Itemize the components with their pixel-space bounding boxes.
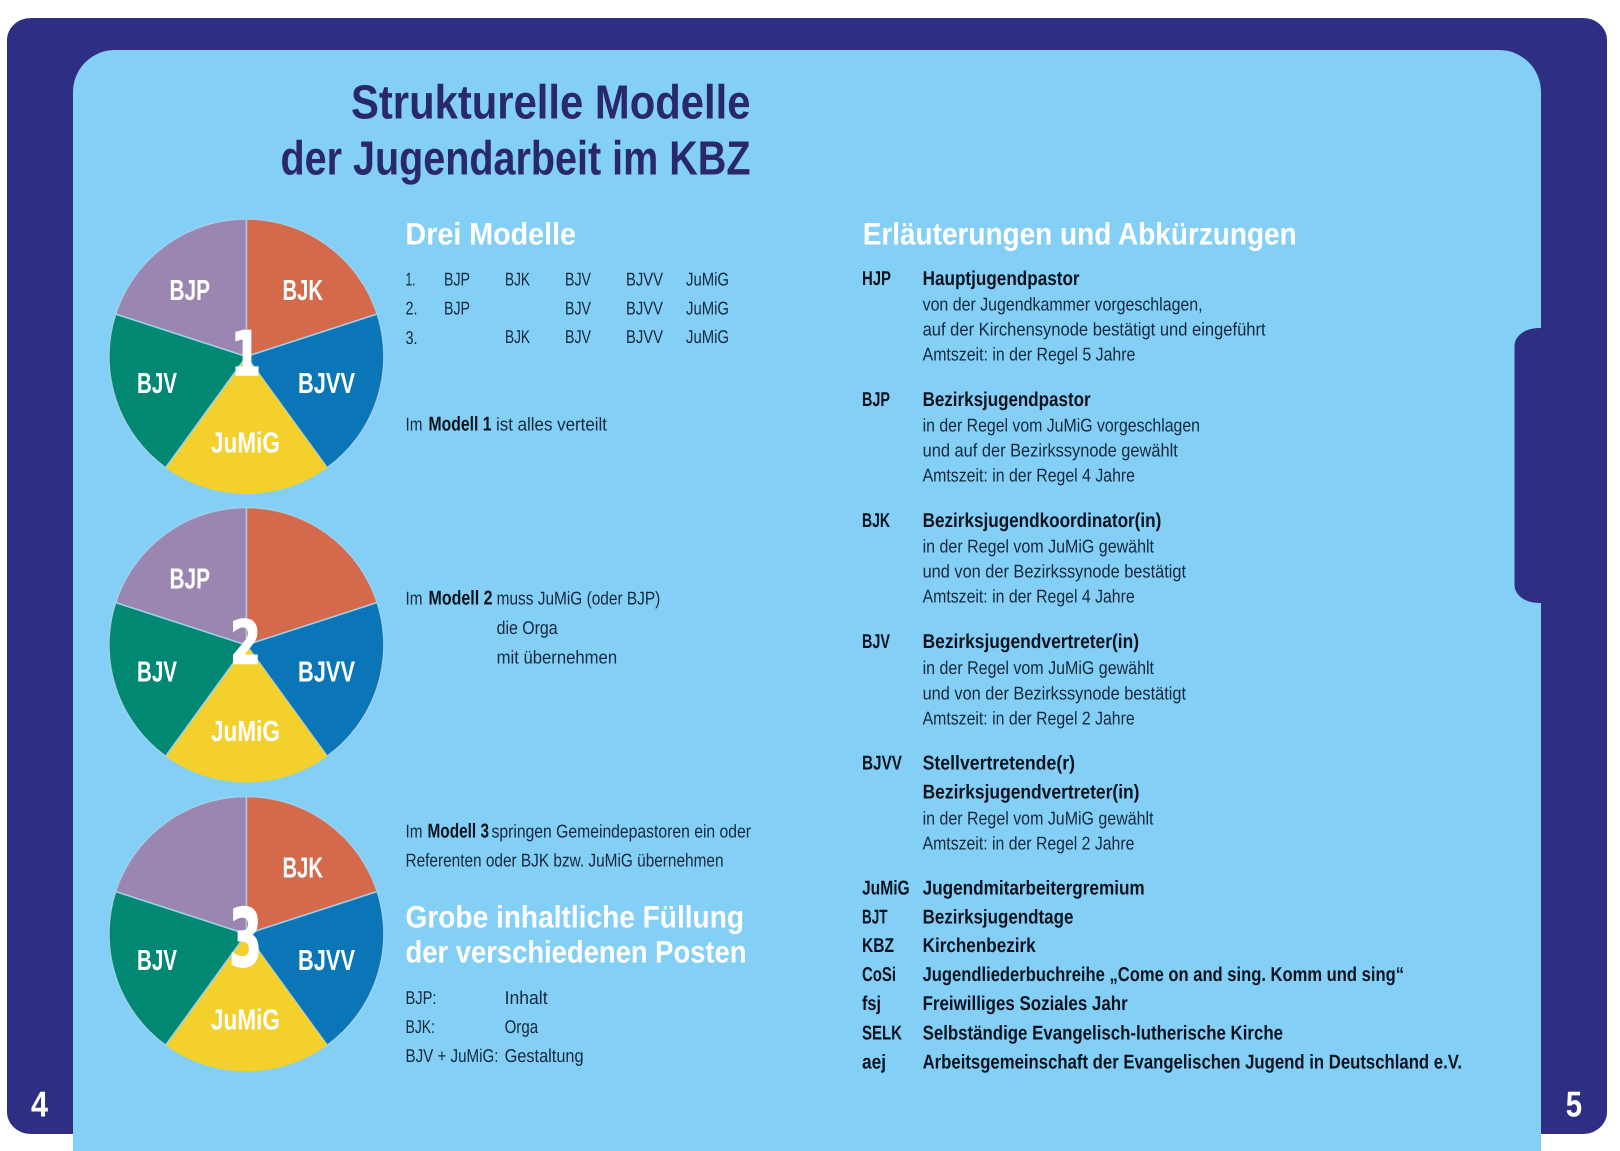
list: content of posts: BJK: — [406, 1016, 435, 1037]
title: Strukturelle Modelle — [351, 76, 750, 130]
pie chart: model 3: 3 — [229, 892, 262, 985]
pie chart: model 3: BJVV — [298, 945, 355, 977]
entry: BJP — [862, 389, 1200, 486]
entry: BJV: und von der Bezirkssynode bestätigt — [923, 682, 1186, 704]
text: model 1 note — [406, 413, 607, 435]
table: three models: BJP — [444, 268, 470, 290]
entry: BJK — [862, 510, 1186, 607]
entry: BJK: Amtszeit: in der Regel 4 Jahre — [923, 586, 1135, 607]
pie chart: model 2 — [109, 508, 384, 782]
table: three models: JuMiG — [686, 268, 729, 290]
list: further abbreviations: Selbständige Evangelisch-lutherische Kirche — [923, 1022, 1283, 1044]
text: model 2 note — [406, 587, 660, 667]
list: further abbreviations: Jugendmitarbeitergremium — [923, 877, 1145, 899]
table: three models: BJK — [505, 268, 530, 290]
list: further abbreviations: Jugendliederbuchreihe „Come on and sing. Komm und sing“ — [923, 964, 1404, 986]
text: model 1 note: Im — [406, 414, 422, 434]
pie chart: model 2: BJV — [137, 657, 177, 689]
pie chart: model 1: BJK — [282, 275, 323, 307]
entry: BJP: Amtszeit: in der Regel 4 Jahre — [923, 465, 1135, 486]
heading: Drei Modelle: Drei Modelle — [406, 216, 576, 252]
list: further abbreviations: JuMiG — [862, 877, 910, 899]
list: content of posts: Inhalt — [505, 987, 548, 1008]
pie chart: model 3 — [109, 796, 384, 1071]
heading: Grobe inhaltliche Füllung: Grobe inhaltliche Füllung — [406, 900, 744, 934]
table: three models: BJV — [565, 298, 591, 318]
text: model 2 note: Modell 2 — [428, 587, 492, 609]
list: further abbreviations: BJT — [862, 906, 888, 928]
text: model 3 note: Modell 3 — [428, 820, 489, 842]
text: model 3 note: springen Gemeindepastoren ein oder — [492, 821, 751, 842]
navy side tab — [1514, 328, 1541, 603]
title — [280, 76, 750, 186]
entry: BJVV — [862, 752, 1154, 853]
list: content of posts: Orga — [505, 1016, 539, 1037]
entry: BJV: Bezirksjugendvertreter(in) — [923, 631, 1139, 653]
pie chart: model 1: BJV — [137, 368, 177, 400]
entry: HJP: Hauptjugendpastor — [923, 268, 1080, 290]
pie chart: model 3: BJK — [282, 852, 323, 884]
list: content of posts: Gestaltung — [505, 1045, 584, 1066]
list: further abbreviations: aej — [862, 1051, 886, 1073]
list: further abbreviations: Bezirksjugendtage — [923, 906, 1073, 928]
table: three models: JuMiG — [686, 298, 729, 318]
entry: HJP: auf der Kirchensynode bestätigt und eingeführt — [923, 319, 1266, 340]
pie chart: model 1: BJVV — [298, 368, 355, 400]
text: model 3 note: Referenten oder BJK bzw. JuMiG übernehmen — [406, 850, 724, 871]
table: three models: JuMiG — [686, 326, 729, 347]
list: content of posts: BJP: — [406, 987, 436, 1008]
entry: HJP: von der Jugendkammer vorgeschlagen, — [923, 294, 1203, 315]
pie chart: model 2: 2 — [230, 608, 261, 678]
entry: BJV: BJV — [862, 631, 890, 653]
table: three models: BJV — [565, 268, 591, 290]
entry: BJV — [862, 631, 1186, 728]
text: model 3 note — [406, 820, 751, 871]
title: der Jugendarbeit im KBZ — [280, 132, 750, 186]
text: model 1 note: Modell 1 — [428, 413, 492, 435]
list: content of posts: BJV + JuMiG: — [406, 1045, 498, 1066]
entry: HJP — [862, 268, 1266, 365]
text: model 2 note: mit übernehmen — [497, 646, 617, 667]
entry: BJVV: Amtszeit: in der Regel 2 Jahre — [923, 832, 1134, 853]
pie chart: model 1 — [109, 219, 384, 494]
list: further abbreviations: KBZ — [862, 935, 894, 957]
entry: BJVV: in der Regel vom JuMiG gewählt — [923, 807, 1154, 828]
page number 4: 4 — [31, 1084, 48, 1125]
text: model 2 note: muss JuMiG (oder BJP) — [497, 588, 660, 608]
entry: HJP: Amtszeit: in der Regel 5 Jahre — [923, 344, 1135, 365]
table: three models: 2. — [406, 298, 418, 318]
entry: BJV: Amtszeit: in der Regel 2 Jahre — [923, 708, 1135, 728]
list: further abbreviations: fsj — [862, 993, 881, 1015]
table: three models: BJP — [444, 298, 470, 318]
heading: Grobe inhaltliche Füllung: der verschiedenen Posten — [406, 934, 746, 970]
pie chart: model 1: BJP — [170, 275, 210, 307]
text: model 2 note: die Orga — [497, 617, 558, 638]
list: further abbreviations: Kirchenbezirk — [923, 935, 1036, 957]
entry: BJK: in der Regel vom JuMiG gewählt — [923, 536, 1154, 557]
pie chart: model 2: JuMiG — [211, 716, 280, 748]
list: further abbreviations: Freiwilliges Soziales Jahr — [923, 993, 1128, 1015]
table: three models: 3. — [406, 327, 418, 348]
text: model 3 note: Im — [406, 821, 422, 842]
list: further abbreviations — [862, 877, 1462, 1073]
table: three models: BJVV — [626, 326, 664, 347]
list: content of posts — [406, 987, 584, 1066]
pie chart: model 1: 1 — [231, 319, 261, 390]
pie chart: model 3: JuMiG — [211, 1004, 280, 1036]
entry: BJK: Bezirksjugendkoordinator(in) — [923, 510, 1161, 532]
list: further abbreviations: CoSi — [862, 964, 896, 986]
entry: BJV: in der Regel vom JuMiG gewählt — [923, 657, 1154, 678]
table: three models: BJVV — [626, 268, 664, 290]
pie chart: model 2: BJVV — [298, 657, 355, 689]
table: three models: BJV — [565, 326, 591, 347]
heading: Erläuterungen und Abkürzungen: Erläuterungen und Abkürzungen — [863, 216, 1297, 252]
entry: BJP: Bezirksjugendpastor — [923, 389, 1091, 411]
pie chart: model 1: JuMiG — [211, 428, 280, 460]
heading: Grobe inhaltliche Füllung — [406, 900, 746, 970]
entry: HJP: HJP — [862, 268, 891, 290]
entry: BJP: und auf der Bezirkssynode gewählt — [923, 440, 1178, 461]
entry: BJP: BJP — [862, 389, 890, 411]
table: three models: 1. — [406, 268, 416, 290]
table: three models: BJVV — [626, 298, 664, 318]
page number 5: 5 — [1566, 1084, 1582, 1125]
list: further abbreviations: Arbeitsgemeinschaft der Evangelischen Jugend in Deutschland e.V. — [923, 1051, 1462, 1073]
entry: BJK: BJK — [862, 510, 890, 532]
pie chart: model 3: BJV — [137, 945, 177, 977]
entry: BJK: und von der Bezirkssynode bestätigt — [923, 561, 1186, 582]
pie chart: model 2: BJP — [170, 563, 210, 595]
entry: BJVV: Stellvertretende(r) — [923, 752, 1075, 774]
text: model 1 note: ist alles verteilt — [496, 414, 607, 434]
list: further abbreviations: SELK — [862, 1022, 902, 1044]
table: three models: BJK — [505, 326, 530, 347]
text: model 2 note: Im — [406, 588, 422, 608]
entry: BJVV: Bezirksjugendvertreter(in) — [923, 782, 1140, 804]
entry: BJVV: BJVV — [862, 752, 903, 774]
entry: BJP: in der Regel vom JuMiG vorgeschlagen — [923, 415, 1200, 436]
table: three models — [406, 268, 729, 348]
